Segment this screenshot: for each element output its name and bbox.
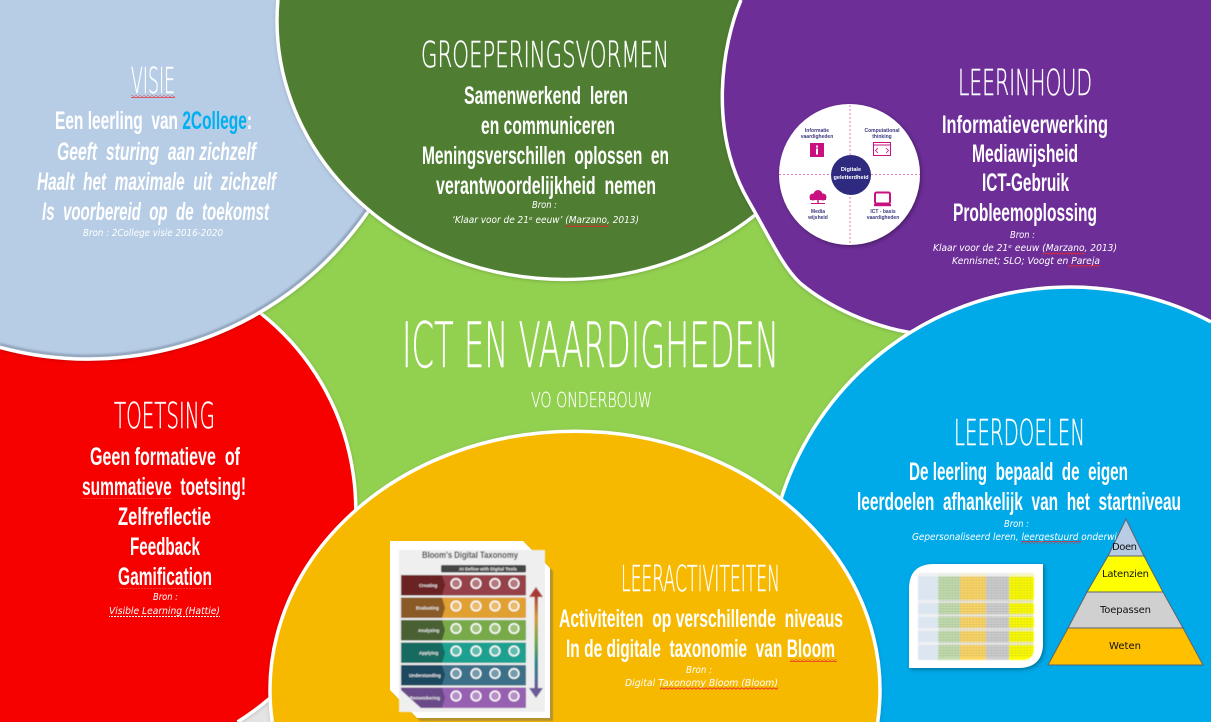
heading: toetsing: TOETSING [114,396,215,437]
source: toetsing: Visible Learning (Hattie) [109,606,220,617]
pyramid: weten toepassen latenzien doen: Toepassen [1099,605,1151,616]
text: visie statements: Haalt het maximale uit zichzelf [37,168,278,196]
pyramid: weten toepassen latenzien doen: Weten [1109,641,1141,652]
diagram: digitale geletterdheid wheel: wijsheid [807,215,828,221]
source: leerinhoud: Bron : [1010,230,1035,241]
pyramid: weten toepassen latenzien doen: Doen [1112,542,1137,553]
subtitle: VO ONDERBOUW [531,388,652,412]
row: understanding [401,665,526,686]
image: bloom's digital taxonomy [390,541,553,721]
source: leeractiviteiten [625,665,778,690]
row: analyzing [401,620,526,640]
heading: leerinhoud: LEERINHOUD [958,63,1092,104]
diagram: digitale geletterdheid wheel: ICT - basis [870,209,896,215]
text: toetsing items: Feedback [130,533,200,561]
panel: leeractiviteiten: LEERACTIVITEITEN [621,559,780,600]
text: groeperingsvormen items: Samenwerkend leren [464,82,628,110]
row: applying [401,642,526,663]
image: bloom's digital taxonomy: At Define with Digital Tools [459,566,517,572]
row: creating: Creating [419,583,438,588]
image: leerdoelen table [909,564,1043,668]
row: remembering [401,688,526,708]
panel: visie [0,0,428,359]
icon: computational thinking [874,142,890,156]
panel: toetsing [0,260,356,722]
source: leeractiviteiten: Bron : [686,665,712,676]
text: visie statements: Een leerling van 2College: [55,107,252,135]
text: leeractiviteiten: In de digitale taxonomie van Bloom [566,635,835,663]
text: leeractiviteiten: Activiteiten op verschillende niveaus [559,605,843,633]
row: applying: Applying [419,650,438,656]
pyramid: weten toepassen latenzien doen [1048,519,1203,665]
pyramid: weten toepassen latenzien doen: Latenzien [1102,569,1149,580]
text: groeperingsvormen items: verantwoordelijkheid nemen [436,172,656,200]
row: evaluating [401,598,526,618]
text: visie statements [37,107,278,226]
center title [402,309,779,412]
panel: groeperingsvormen [277,0,853,279]
text: leerinhoud items [942,111,1108,227]
diagram: digitale geletterdheid wheel: Informatie [805,128,829,134]
row: evaluating: Evaluating [416,606,439,610]
row: understanding: Understanding [409,673,441,678]
panel: leerdoelen [767,287,1211,722]
source: groeperingsvormen: Bron : [532,200,557,211]
source: leerdoelen: Gepersonaliseerd leren, leergestuurd onderwijs [912,532,1124,543]
source: leeractiviteiten: Digital Taxonomy Bloom (Bloom) [625,678,778,689]
source: visie: Bron : 2College visie 2016-2020 [83,228,223,239]
source: leerdoelen [912,519,1124,544]
text: leerinhoud items: Informatieverwerking [942,111,1108,139]
text: visie statements: Is voorbereid op de toekomst [42,198,270,226]
text: leerinhoud items: Probleemoplossing [953,199,1097,227]
row: creating [401,575,526,596]
text: toetsing items [82,443,246,591]
diagram: digitale geletterdheid wheel: vaardigheden [867,215,899,221]
source: leerinhoud [933,230,1117,268]
text: toetsing items: Geen formatieve of [90,443,240,471]
text: toetsing items: Gamification [118,563,212,591]
source: groeperingsvormen [452,200,639,227]
text: groeperingsvormen items: Meningsverschillen oplossen en [422,142,669,170]
text: visie statements: Geeft sturing aan zichzelf [57,138,258,166]
source: leerdoelen: Bron : [1004,519,1029,530]
text: leeractiviteiten [559,605,843,663]
text: leerdoelen [857,458,1181,516]
diagram: digitale geletterdheid wheel: vaardigheden [801,134,833,140]
panel: visie: VISIE [131,61,175,102]
row: remembering: Remembering [410,696,440,700]
panel: leeractiviteiten [270,431,880,722]
arrow: thinking skills scale [529,587,543,698]
diagram: digitale geletterdheid wheel: geletterdheid [833,175,869,181]
diagram: digitale geletterdheid wheel: thinking [872,134,892,140]
diagram: digitale geletterdheid wheel: Digitale [841,167,861,173]
heading: leerdoelen: LEERDOELEN [954,413,1085,454]
diagram: digitale geletterdheid wheel: Computational [864,128,900,134]
icon: informatie [810,143,824,157]
text: toetsing items: summatieve toetsing! [82,473,246,501]
source: leerinhoud: Kennisnet; SLO; Voogt en Pareja [952,256,1100,267]
panel: leerinhoud [722,0,1211,400]
heading: groeperingsvormen: GROEPERINGSVORMEN [421,35,669,76]
source: toetsing: Bron : [153,592,178,603]
icon: media cloud [810,190,826,204]
source: leerinhoud: Klaar voor de 21ᵉ eeuw (Marzano, 2013) [933,243,1117,254]
text: toetsing items: Zelfreflectie [118,503,211,531]
diagram: digitale geletterdheid wheel [779,104,920,245]
text: groeperingsvormen items: en communiceren [481,112,615,140]
image: bloom's digital taxonomy: Bloom's Digital Taxonomy [422,550,518,560]
source: toetsing [109,592,220,617]
diagram: digitale geletterdheid wheel: Media [811,209,825,215]
row: analyzing: Analyzing [418,628,440,633]
text: leerinhoud items: Mediawijsheid [972,140,1078,168]
source: groeperingsvormen: ‘Klaar voor de 21ᵉ eeuw’ (Marzano, 2013) [452,215,639,226]
text: leerinhoud items: ICT-Gebruik [982,169,1069,197]
center title: ICT EN VAARDIGHEDEN [402,309,779,382]
icon: ict laptop [874,192,891,206]
text: groeperingsvormen items [422,82,669,200]
